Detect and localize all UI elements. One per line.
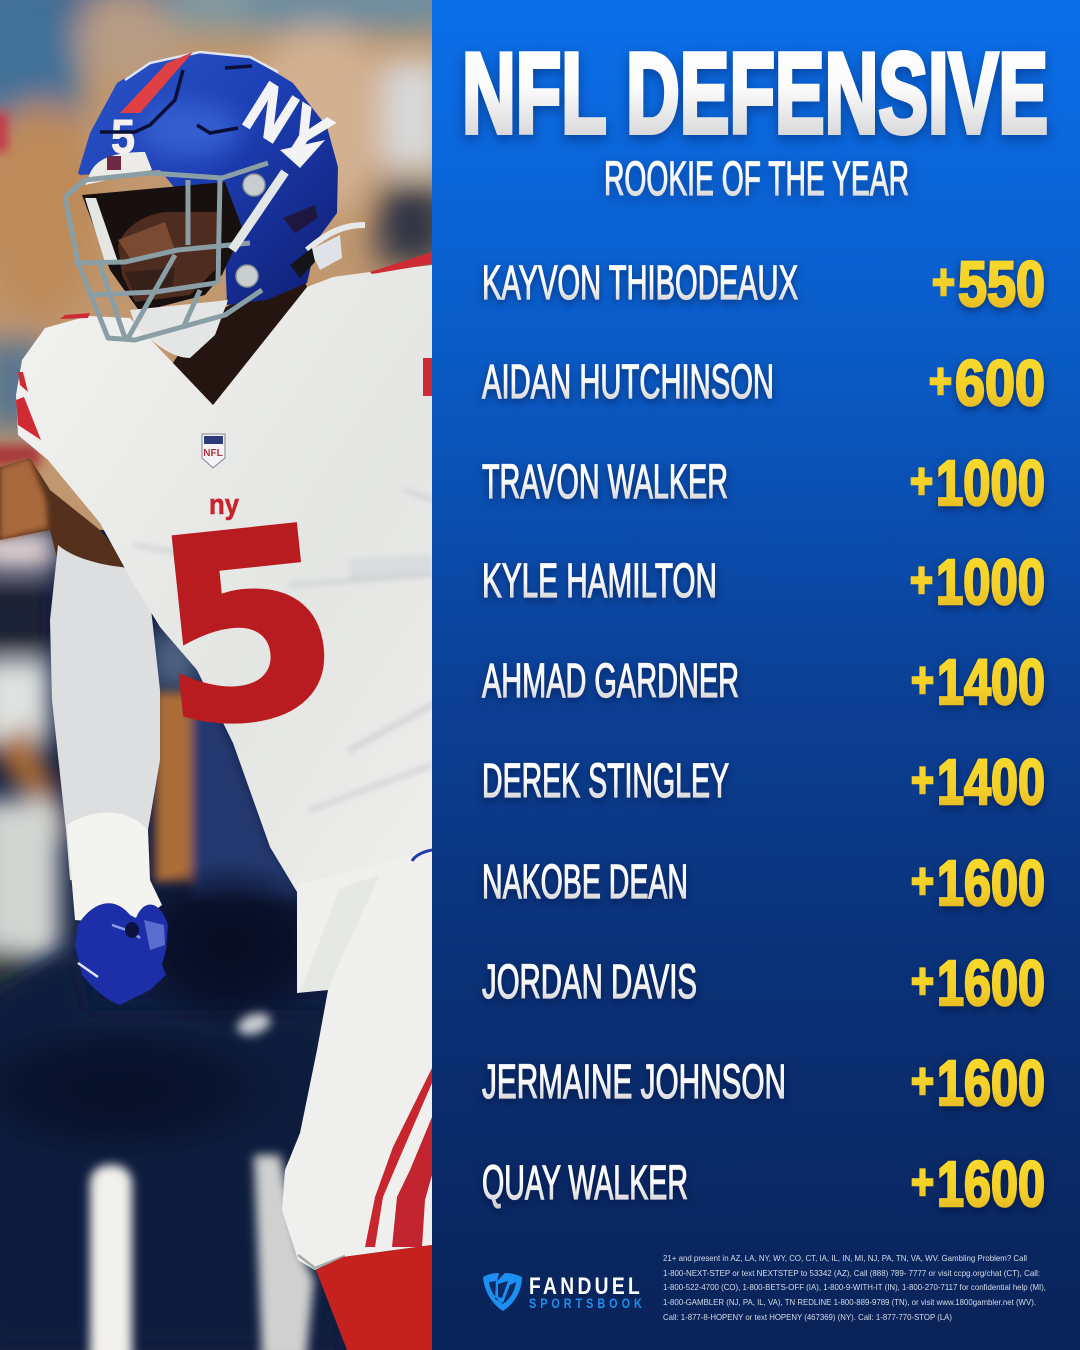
row: Ahmad Gardner +1400 (482, 646, 1045, 718)
row: Nakobe Dean +1600 (482, 847, 1045, 919)
helmet number: 5 (111, 111, 135, 164)
row: Ahmad Gardner +1400: AHMAD GARDNER (482, 654, 739, 708)
row: Travon Walker +1000: 1000 (936, 447, 1045, 519)
sleeve stripes (16, 252, 432, 440)
legal disclaimer (663, 1253, 1046, 1322)
row: Ahmad Gardner +1400: + (911, 652, 934, 708)
legal disclaimer: Call: 1-877-8-HOPENY or text HOPENY (467369) (NY). Call: 1-877-770-STOP (LA) (663, 1312, 952, 1322)
helmet ear vent (283, 205, 318, 233)
row: Derek Stingley +1400 (482, 746, 1045, 818)
facemask cage (65, 163, 285, 340)
row: Derek Stingley +1400: 1400 (937, 746, 1045, 818)
neck (173, 284, 307, 405)
NY helmet logo (242, 80, 336, 168)
row: Derek Stingley +1400: + (911, 752, 934, 808)
row: Jordan Davis +1600 (482, 947, 1045, 1019)
row: Travon Walker +1000: + (910, 453, 933, 509)
row: Quay Walker +1600: QUAY WALKER (482, 1156, 688, 1210)
chin strap (307, 225, 365, 250)
jersey number 5: 5 (142, 472, 352, 786)
row: Ahmad Gardner +1400: 1400 (937, 646, 1045, 718)
panel: odds background (432, 0, 1080, 1350)
row: Kyle Hamilton +1000: + (910, 552, 933, 608)
face opening (82, 182, 243, 312)
row: Derek Stingley +1400: DEREK STINGLEY (482, 754, 729, 808)
helmet vents (100, 66, 252, 133)
legal disclaimer: 1-800-GAMBLER (NJ, PA, IL, VA), TN REDLINE 1-800-889-9789 (TN), or visit www.1800gambler.net (WV). (663, 1297, 1036, 1307)
row: Jermaine Johnson +1600: JERMAINE JOHNSON (482, 1055, 786, 1109)
row: Kyle Hamilton +1000: KYLE HAMILTON (482, 554, 717, 608)
wrist tape (67, 812, 162, 925)
icon: FanDuel shield (483, 1273, 522, 1311)
row: Jordan Davis +1600: + (911, 953, 934, 1009)
row: Nakobe Dean +1600: + (911, 853, 934, 909)
row: Jordan Davis +1600: 1600 (937, 947, 1045, 1019)
helmet shell (78, 52, 338, 305)
row: Aidan Hutchinson +600: + (929, 353, 952, 409)
FanDuel Sportsbook logo: FANDUEL (529, 1272, 643, 1300)
row: Kayvon Thibodeaux +550: 550 (958, 248, 1045, 320)
left arm and skin (0, 456, 124, 568)
row: Kayvon Thibodeaux +550: + (932, 254, 955, 310)
Giants wordmark on chest: ny (209, 489, 239, 521)
arm sleeve (50, 545, 160, 880)
row: Jermaine Johnson +1600: 1600 (937, 1047, 1045, 1119)
helmet (65, 52, 365, 358)
icon: blue glove (75, 903, 168, 1005)
row: Jordan Davis +1600: JORDAN DAVIS (482, 955, 697, 1009)
row: Aidan Hutchinson +600: AIDAN HUTCHINSON (482, 355, 774, 409)
red socks (316, 1245, 432, 1350)
jersey shadows (135, 490, 432, 810)
row: Nakobe Dean +1600: 1600 (937, 847, 1045, 919)
pants (282, 850, 432, 1270)
jersey torso (16, 265, 432, 892)
row: Quay Walker +1600: + (911, 1154, 934, 1210)
row: Jermaine Johnson +1600 (482, 1047, 1045, 1119)
row: Kyle Hamilton +1000: 1000 (936, 546, 1045, 618)
legal disclaimer: 1-800-NEXT-STEP or text NEXTSTEP to 53342 (AZ), Call (888) 789- 7777 or visit ccpg.org/chat (CT), Call: (663, 1268, 1040, 1278)
row: Nakobe Dean +1600: NAKOBE DEAN (482, 855, 688, 909)
row: Jermaine Johnson +1600: + (911, 1053, 934, 1109)
NFL shield: NFL (203, 448, 223, 459)
title (462, 30, 1048, 206)
row: Kayvon Thibodeaux +550: KAYVON THIBODEAUX (482, 256, 798, 310)
blurred crowd background (0, 0, 450, 1350)
row: Quay Walker +1600 (482, 1148, 1045, 1220)
helmet stripe (120, 52, 193, 113)
row: Aidan Hutchinson +600: 600 (955, 347, 1045, 419)
row: Travon Walker +1000 (482, 447, 1045, 519)
FanDuel Sportsbook logo (483, 1272, 646, 1311)
forehead pad (85, 152, 152, 185)
odds list (482, 248, 1045, 1220)
chin cup (130, 300, 228, 358)
legal disclaimer: 21+ and present in AZ, LA, NY, WY, CO, CT, IA, IL, IN, MI, NJ, PA, TN, VA, WV. Gambling Problem? Call (663, 1253, 1027, 1263)
FanDuel Sportsbook logo: SPORTSBOOK (529, 1296, 646, 1311)
legal disclaimer: 1-800-522-4700 (CO), 1-800-BETS-OFF (IA), 1-800-9-WITH-IT (IN), 1-800-270-7117 for confidential help (MI), (663, 1282, 1046, 1292)
row: Travon Walker +1000: TRAVON WALKER (482, 455, 728, 509)
row: Aidan Hutchinson +600 (482, 347, 1045, 419)
row: Quay Walker +1600: 1600 (937, 1148, 1045, 1220)
NFL shield (202, 434, 225, 468)
photo: player in white Giants uniform (0, 0, 450, 1350)
row: Kyle Hamilton +1000 (482, 546, 1045, 618)
visor clips (236, 174, 265, 287)
NY helmet logo: NY (231, 68, 343, 179)
